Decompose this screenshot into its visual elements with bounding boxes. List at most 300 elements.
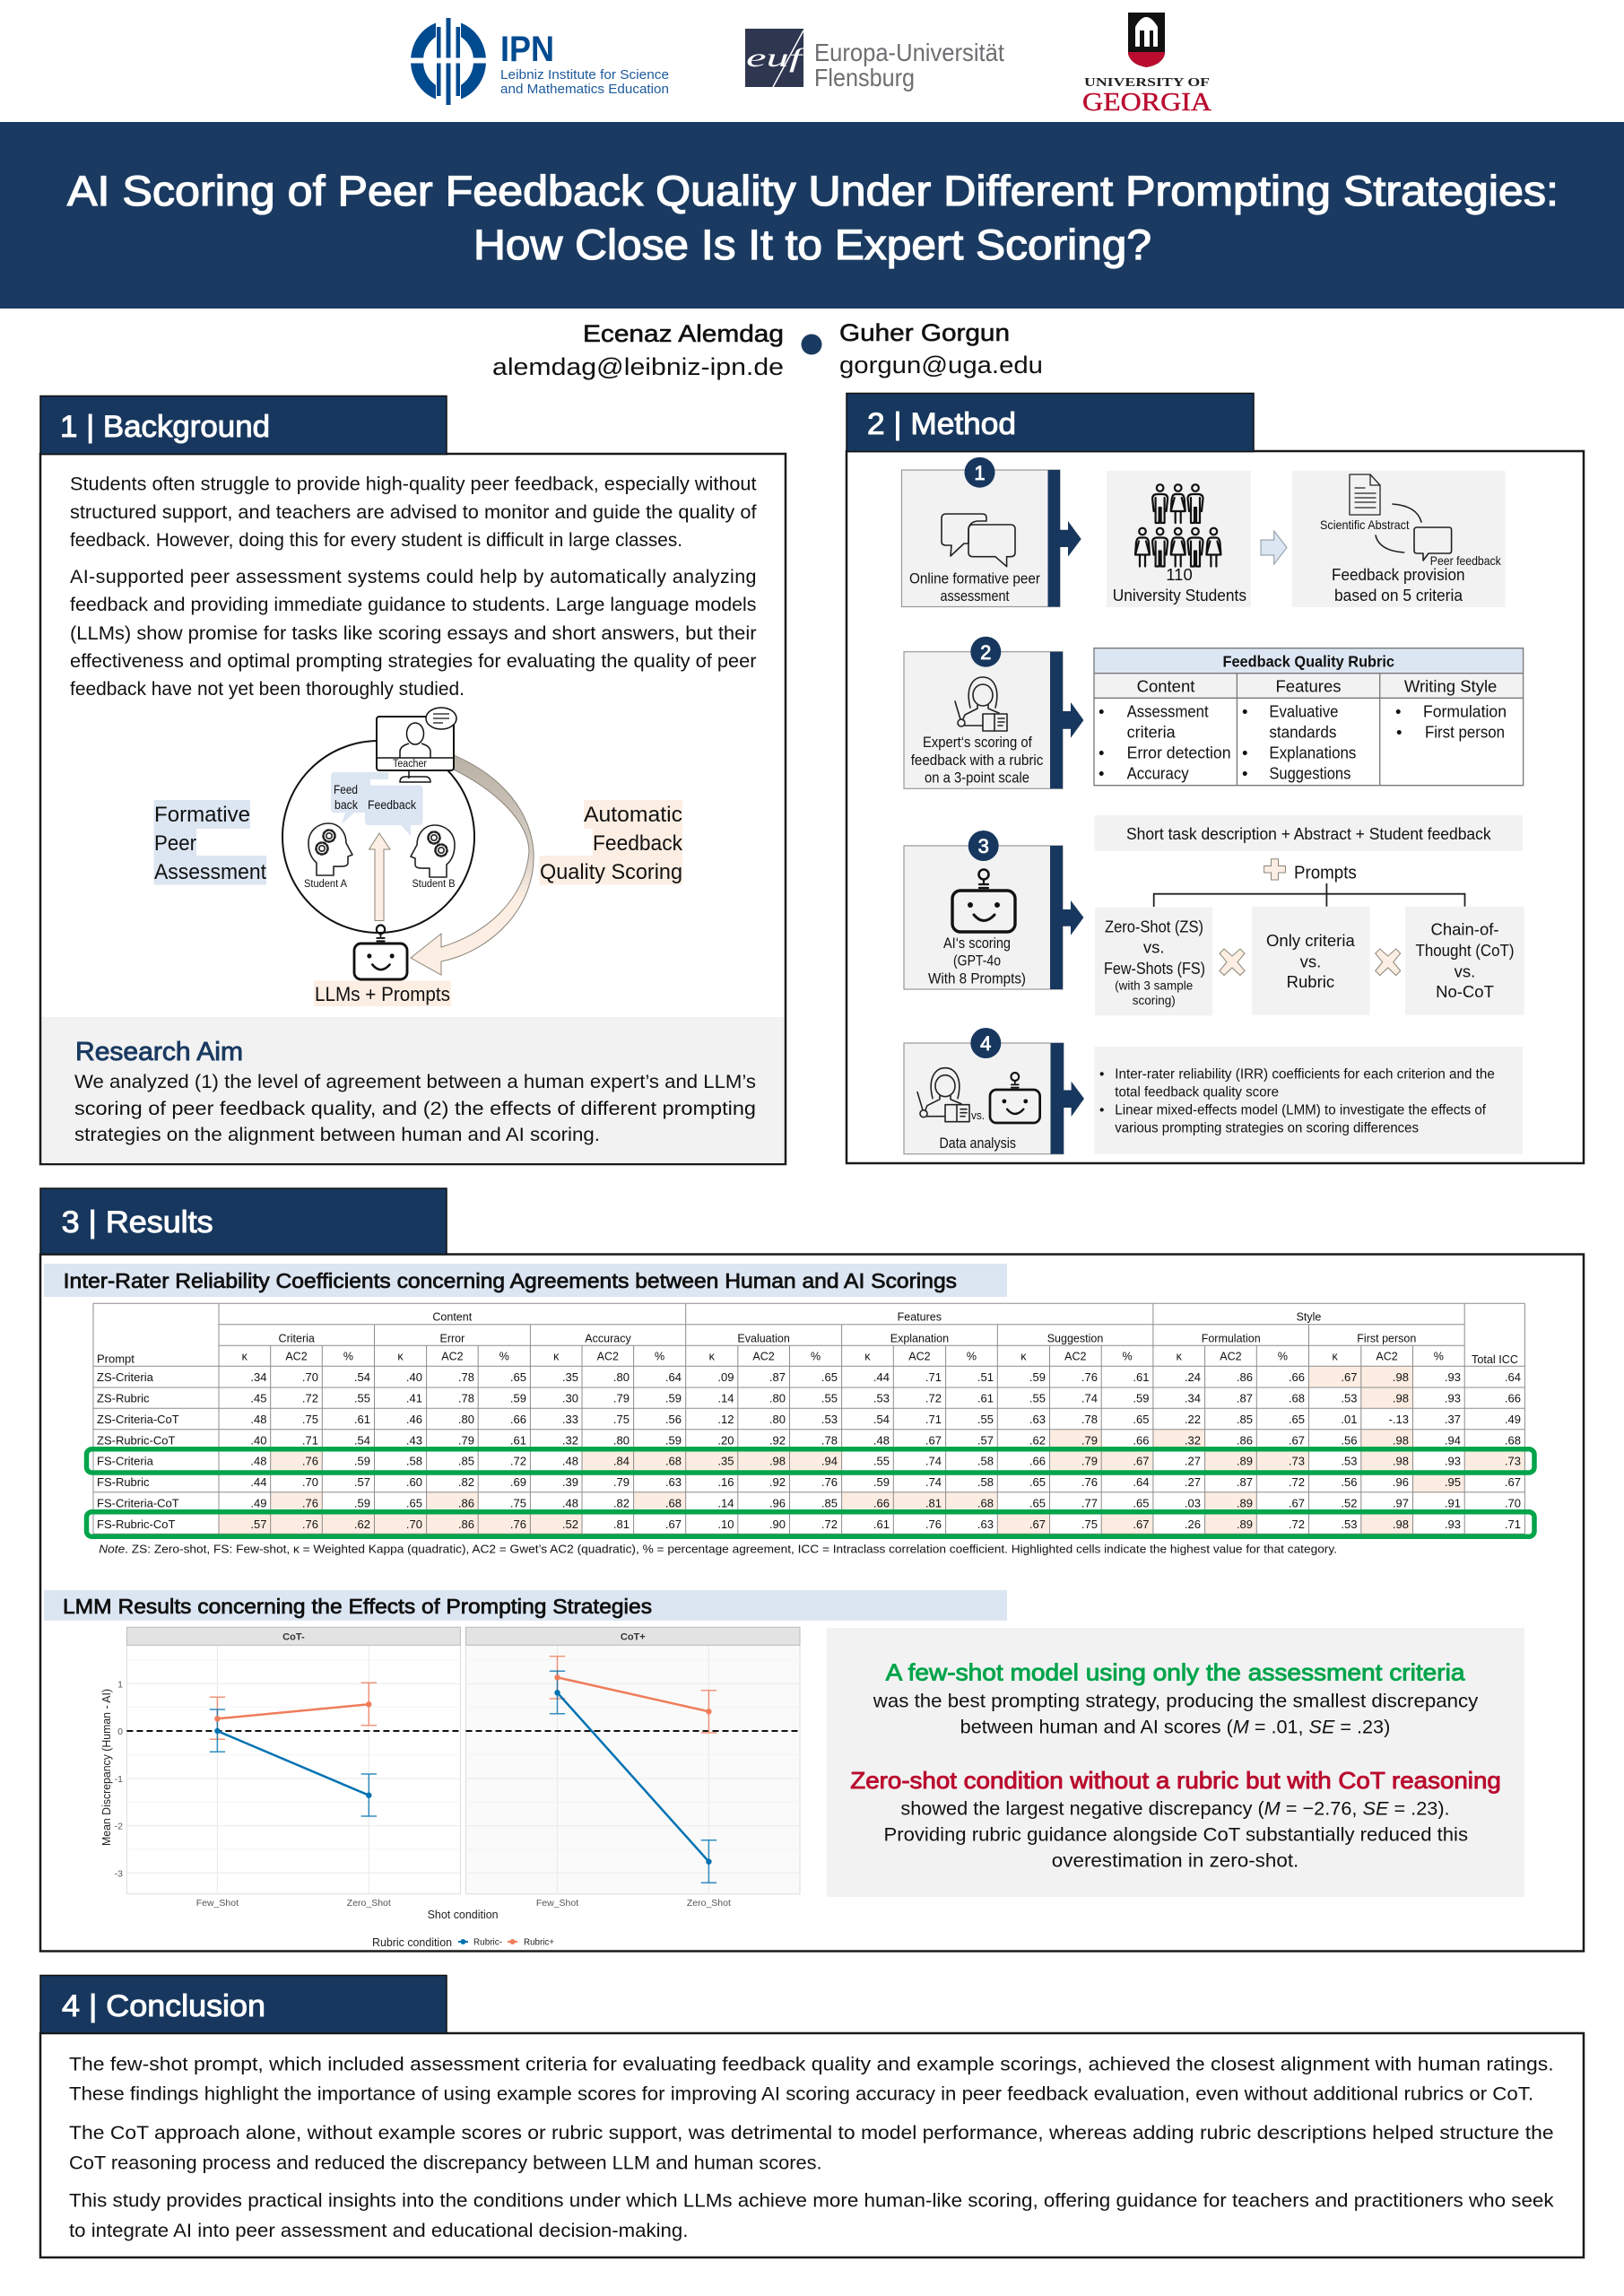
step 1 [902,457,1505,607]
icon: student A: Student A [304,879,347,890]
heading: background [40,396,447,454]
row: ZS-Criteria: .65 [821,1370,838,1384]
row: FS-Rubric-CoT: .89 [1237,1518,1253,1531]
row: FS-Rubric-CoT: .93 [1445,1518,1461,1531]
icon: robot LLM [354,926,407,979]
row: FS-Criteria: .67 [1133,1455,1150,1468]
row: ZS-Criteria-CoT: .56 [665,1413,682,1426]
table header: Error [440,1333,465,1345]
text block: background paragraphs: feedback and providing immediate guidance to students. Large language models [70,594,757,615]
table header: κ [864,1351,871,1363]
label: automatic feedback quality scoring: Automatic [584,803,682,827]
research aim [41,1017,784,1163]
110 university students: University Students [1113,586,1246,604]
row: ZS-Criteria-CoT: .46 [406,1413,422,1426]
analysis description: total feedback quality score [1115,1085,1279,1100]
row: ZS-Rubric: .79 [613,1392,630,1405]
table header: Evaluation [737,1333,790,1345]
row: FS-Criteria-CoT: .97 [1393,1496,1409,1509]
row: ZS-Rubric-CoT: .66 [1133,1433,1150,1447]
callout: key findings: A few-shot model using only the assessment criteria [886,1658,1465,1685]
option: zero-shot vs few-shots [1095,908,1212,1015]
tree connector [1154,883,1465,907]
row: ZS-Criteria-CoT: .61 [354,1413,370,1426]
row: FS-Rubric: .96 [1393,1475,1409,1489]
table header: AC2 [1220,1351,1242,1363]
row: FS-Rubric: .64 [1133,1475,1150,1489]
row: FS-Criteria [97,1455,1521,1468]
row: FS-Criteria-CoT: .89 [1237,1496,1253,1509]
logo: Europa-Universität Flensburg [745,29,1004,91]
rubric: features items: standards [1269,722,1336,741]
row: FS-Rubric-CoT: .86 [458,1518,474,1531]
row: ZS-Criteria-CoT: .37 [1445,1413,1461,1426]
row: ZS-Rubric: .53 [873,1392,890,1405]
prompts heading: Prompts [1294,863,1357,883]
panel: method [847,393,1584,1163]
option: only criteria vs rubric: Only criteria [1266,931,1355,950]
row: FS-Criteria: .94 [821,1455,838,1468]
icon: student A [304,823,352,890]
row: FS-Rubric: .67 [1505,1475,1521,1489]
option: chain-of-thought vs no-cot: Thought (CoT) [1415,941,1514,960]
row: ZS-Criteria: ZS-Criteria [97,1370,154,1384]
rubric: content items [1099,701,1231,782]
row: ZS-Rubric: .34 [1185,1392,1201,1405]
row: FS-Criteria: .93 [1445,1455,1461,1468]
subheading: inter-rater reliability: Inter-Rater Reliability Coefficients concerning Agreements between Human and AI Scorings [64,1269,957,1292]
step 3 [904,815,1524,1015]
row: ZS-Rubric: .93 [1445,1392,1461,1405]
row: ZS-Criteria-CoT: .85 [1237,1413,1253,1426]
row: FS-Rubric-CoT: .52 [562,1518,578,1531]
x axis: Few_Shot [196,1898,239,1909]
table header: % [811,1351,821,1363]
row: ZS-Criteria-CoT: .75 [613,1413,630,1426]
text block: conclusion paragraphs: This study provides practical insights into the conditions under which LLMs achieve more human-like scoring, offering guidance for teachers and practitioners who seek [69,2190,1554,2212]
row: FS-Rubric: .79 [613,1475,630,1489]
row: ZS-Criteria [97,1370,1521,1384]
row: ZS-Rubric: .66 [1505,1392,1521,1405]
row: FS-Criteria-CoT: .59 [354,1496,370,1509]
table: feedback quality rubric: Features [1275,677,1342,696]
step 2 box: 2 [980,641,991,664]
row: ZS-Rubric: .61 [977,1392,994,1405]
feedback provision: based on 5 criteria [1334,586,1463,604]
table header: % [1278,1351,1288,1363]
table header: Formulation [1202,1333,1261,1345]
table header: AC2 [908,1351,931,1363]
row: FS-Criteria-CoT: .49 [250,1496,267,1509]
table header: AC2 [1376,1351,1398,1363]
label: automatic feedback quality scoring: Quality Scoring [540,860,682,884]
row: FS-Rubric-CoT: .26 [1185,1518,1201,1531]
speech bubble: feed back: Feed [334,783,358,796]
row: FS-Rubric-CoT: .53 [1341,1518,1358,1531]
row: FS-Criteria: .84 [613,1455,630,1468]
label: automatic feedback quality scoring: Feedback [593,831,683,856]
row: FS-Criteria: .89 [1237,1455,1253,1468]
panel: conclusion [40,1975,1584,2257]
table header: AC2 [752,1351,775,1363]
table header: % [499,1351,509,1363]
row: FS-Rubric: .39 [562,1475,578,1489]
text block: conclusion paragraphs: These findings highlight the importance of using example scores for improving AI scoring accuracy in peer feedback evaluation, even without additional rubrics or CoT. [69,2083,1533,2105]
option: only criteria vs rubric [1252,907,1370,1015]
authors: gorgun@uga.edu [839,352,1043,378]
panel: results [40,1188,1584,1952]
analysis description [1094,1047,1523,1154]
table header: κ [397,1351,404,1363]
logos row [405,13,1211,117]
row: FS-Rubric: .56 [1341,1475,1358,1489]
rubric: content items: • [1099,763,1104,782]
row: FS-Criteria: .76 [302,1455,318,1468]
logo: Europa-Universität Flensburg: Europa-Universität [814,39,1004,66]
row: FS-Criteria-CoT: .96 [769,1496,786,1509]
row: ZS-Criteria: .61 [1133,1370,1150,1384]
table header: Prompt [97,1352,135,1365]
authors: alemdag@leibniz-ipn.de [492,353,784,380]
arrow: light [1261,531,1287,564]
option: only criteria vs rubric: vs. [1300,952,1321,970]
row: ZS-Criteria: .51 [977,1370,994,1384]
text block: background paragraphs: Students often struggle to provide high-quality peer feedback, especially without [70,474,757,495]
text block: background paragraphs: AI-supported peer assessment systems could help by automatically analyzing [70,566,757,587]
table header: κ [242,1351,248,1363]
row: ZS-Rubric: .59 [1133,1392,1150,1405]
row: FS-Rubric: .65 [1029,1475,1046,1489]
row: ZS-Rubric-CoT [97,1433,1521,1447]
row: ZS-Criteria-CoT: ZS-Criteria-CoT [97,1413,179,1426]
callout: key findings: showed the largest negative discrepancy (M = −2.76, SE = .23). [900,1797,1450,1819]
text block: background paragraphs: feedback have not yet been thoroughly studied. [70,678,465,700]
rubric: writing style items [1395,701,1507,741]
row: FS-Rubric-CoT: .63 [977,1518,994,1531]
logo: University of Georgia [1082,13,1211,117]
row: FS-Criteria-CoT: .67 [1289,1496,1305,1509]
row: FS-Rubric-CoT: .76 [925,1518,942,1531]
table header: Features [898,1311,942,1324]
row: FS-Criteria-CoT: .03 [1185,1496,1201,1509]
row: ZS-Rubric-CoT: .59 [665,1433,682,1447]
step 3 box: (GPT-4o [953,952,1001,970]
row: FS-Criteria: .98 [1393,1455,1409,1468]
step 4 box: vs. [971,1109,985,1122]
row: ZS-Rubric-CoT: .56 [1341,1433,1358,1447]
row: ZS-Rubric: .55 [1029,1392,1046,1405]
facet: CoT- [126,1627,460,1894]
table header: Content [432,1311,473,1324]
row: ZS-Criteria-CoT: .78 [1081,1413,1098,1426]
feedback provision [1292,471,1505,607]
label: formative peer assessment [154,800,266,884]
row: FS-Rubric: FS-Rubric [97,1475,150,1489]
row: FS-Criteria-CoT: .65 [1133,1496,1150,1509]
row: ZS-Criteria: .54 [354,1370,370,1384]
callout: key findings: between human and AI scores (M = .01, SE = .23) [960,1716,1390,1737]
row: ZS-Criteria: .80 [613,1370,630,1384]
table header: AC2 [285,1351,308,1363]
logo: University of Georgia: UNIVERSITY OF [1084,76,1210,90]
table header: κ [1177,1351,1183,1363]
row: FS-Criteria: .72 [510,1455,526,1468]
text block: background paragraphs: feedback. However, doing this for every student is difficult in large classes. [70,529,682,551]
x axis [196,1898,731,1921]
row: ZS-Rubric-CoT: .68 [1505,1433,1521,1447]
row: ZS-Criteria-CoT: .63 [1029,1413,1046,1426]
feedback provision: Scientific Abstract [1320,517,1410,532]
row: FS-Criteria: .66 [1029,1455,1046,1468]
text block: conclusion paragraphs: The CoT approach alone, without example scores or rubric support, was detrimental to model performance, whereas adding rubric descriptions helped structure the [69,2122,1554,2144]
chart: LMM discrepancy by shot condition [100,1627,800,1949]
row: FS-Criteria: .68 [665,1455,682,1468]
row: ZS-Rubric-CoT: .57 [977,1433,994,1447]
label: automatic feedback quality scoring [540,800,683,884]
row: FS-Rubric: .72 [1289,1475,1305,1489]
row: FS-Criteria-CoT: .52 [1341,1496,1358,1509]
row: ZS-Rubric-CoT: .79 [1081,1433,1098,1447]
step 1 box: assessment [940,587,1010,604]
row: ZS-Rubric: .74 [1081,1392,1098,1405]
speech bubble: feed back: back [334,798,358,812]
row: ZS-Rubric: .45 [250,1392,267,1405]
row: FS-Criteria-CoT: FS-Criteria-CoT [97,1496,179,1509]
row: FS-Rubric-CoT [97,1518,1521,1531]
row: ZS-Criteria: .70 [302,1370,318,1384]
row: ZS-Rubric-CoT: .48 [873,1433,890,1447]
row: ZS-Criteria: .59 [1029,1370,1046,1384]
option: zero-shot vs few-shots: Zero-Shot (ZS) [1105,917,1203,935]
logo: University of Georgia: GEORGIA [1082,88,1211,117]
option: zero-shot vs few-shots: scoring) [1133,994,1176,1007]
row: FS-Criteria: .58 [406,1455,422,1468]
callout: key findings: overestimation in zero-shot. [1052,1850,1298,1872]
highlight: FS-Criteria row [86,1449,1534,1473]
analysis description: Linear mixed-effects model (LMM) to investigate the effects of [1115,1102,1487,1118]
table header [97,1311,1518,1366]
logo: IPN: and Mathematics Education [500,82,669,97]
row: FS-Criteria-CoT: .81 [925,1496,942,1509]
row: FS-Criteria: .35 [717,1455,734,1468]
row: ZS-Rubric-CoT: .62 [1029,1433,1046,1447]
label: formative peer assessment: Formative [154,803,250,827]
row: ZS-Criteria: .40 [406,1370,422,1384]
icon: student B: Student B [413,879,456,890]
row: FS-Criteria-CoT: .66 [873,1496,890,1509]
step 2 box [904,637,1083,788]
legend: Rubric condition [372,1935,452,1949]
icon: multiply 2 [1376,949,1401,976]
row: ZS-Rubric: .98 [1393,1392,1409,1405]
step 3 box: 3 [978,835,989,857]
analysis description: • [1099,1102,1104,1118]
row: FS-Criteria: .27 [1185,1455,1201,1468]
110 university students [1107,471,1251,607]
row: FS-Rubric-CoT: .90 [769,1518,786,1531]
icon: multiply 1 [1220,949,1245,976]
rubric: writing style items: First person [1425,722,1505,741]
table header: % [655,1351,664,1363]
row: ZS-Criteria: .64 [665,1370,682,1384]
row: FS-Criteria: FS-Criteria [97,1455,154,1468]
table header: First person [1357,1333,1416,1345]
row: ZS-Criteria: .65 [510,1370,526,1384]
row: ZS-Rubric: .78 [458,1392,474,1405]
rubric: features items: Evaluative [1269,701,1338,720]
row: ZS-Criteria-CoT: .33 [562,1413,578,1426]
row: FS-Rubric-CoT: .72 [1289,1518,1305,1531]
row: FS-Rubric: .27 [1185,1475,1201,1489]
row: ZS-Criteria: .93 [1445,1370,1461,1384]
row: FS-Criteria: .98 [769,1455,786,1468]
diagram: peer assessment loop [154,708,683,1006]
logo: IPN [405,18,669,105]
x axis: Zero_Shot [687,1898,731,1909]
authors: Guher Gorgun [839,319,1010,346]
row: ZS-Criteria-CoT: .55 [977,1413,994,1426]
row: FS-Rubric: .57 [354,1475,370,1489]
table header: AC2 [597,1351,619,1363]
row: ZS-Rubric-CoT: .78 [821,1433,838,1447]
row: ZS-Rubric-CoT: .61 [510,1433,526,1447]
row: ZS-Rubric: .55 [821,1392,838,1405]
table header: % [1122,1351,1133,1363]
prompt base: Short task description + Abstract + Student feedback [1126,824,1491,843]
row: ZS-Rubric-CoT: .92 [769,1433,786,1447]
heading: background: 1 | Background [60,410,270,444]
row: ZS-Criteria-CoT: .80 [769,1413,786,1426]
row: ZS-Criteria: .87 [769,1370,786,1384]
prompt base [1094,815,1523,851]
prompts heading [1264,859,1357,883]
y axis: -2 [115,1822,123,1832]
step 1 box: 1 [974,462,986,484]
legend [372,1935,554,1949]
step 3 box: AI‘s scoring [943,935,1011,952]
logo: Europa-Universität Flensburg: Flensburg [814,64,915,91]
row: ZS-Criteria: .35 [562,1370,578,1384]
analysis description: Inter-rater reliability (IRR) coefficients for each criterion and the [1115,1067,1495,1083]
table header: Explanation [890,1333,949,1345]
analysis description: various prompting strategies on scoring differences [1115,1120,1419,1135]
row: ZS-Criteria: .09 [717,1370,734,1384]
logo: Europa-Universität Flensburg: euf [746,43,807,73]
row: FS-Criteria: .73 [1289,1455,1305,1468]
authors [492,319,1043,380]
row: ZS-Rubric-CoT: .43 [406,1433,422,1447]
row: FS-Criteria-CoT: .75 [510,1496,526,1509]
row: FS-Criteria: .73 [1505,1455,1521,1468]
row: FS-Criteria: .79 [1081,1455,1098,1468]
rubric: writing style items: • [1395,701,1401,720]
row: ZS-Criteria: .64 [1505,1370,1521,1384]
speech bubble: feed back [331,772,388,824]
table header: κ [553,1351,560,1363]
title banner: AI Scoring of Peer Feedback Quality Under Different Prompting Strategies: [67,167,1559,214]
row: FS-Rubric: .76 [1081,1475,1098,1489]
row: FS-Rubric-CoT: .67 [1029,1518,1046,1531]
row: FS-Criteria-CoT: .65 [1029,1496,1046,1509]
row: FS-Rubric: .76 [821,1475,838,1489]
row: FS-Criteria: .48 [562,1455,578,1468]
row: FS-Rubric-CoT: .70 [406,1518,422,1531]
step 2 box: feedback with a rubric [911,752,1044,769]
text block: background paragraphs: structured support, and teachers are advised to monitor and guide the quality of [70,501,757,523]
rubric: features items: • [1242,763,1247,782]
row: ZS-Rubric: .59 [665,1392,682,1405]
title banner [0,122,1624,309]
row: FS-Rubric: .60 [406,1475,422,1489]
row: ZS-Criteria-CoT: -.13 [1389,1413,1409,1426]
step 4 box [904,1028,1084,1154]
option: zero-shot vs few-shots: (with 3 sample [1115,978,1193,992]
row: FS-Criteria: .59 [354,1455,370,1468]
row: FS-Rubric-CoT: .61 [873,1518,890,1531]
y axis: 1 [117,1679,123,1690]
row: ZS-Rubric-CoT: .86 [1237,1433,1253,1447]
table: feedback quality rubric: Writing Style [1404,677,1497,696]
highlight: FS-Rubric-CoT row [86,1512,1534,1536]
row: FS-Rubric-CoT: .67 [1133,1518,1150,1531]
110 university students: 110 [1166,565,1193,584]
row: ZS-Rubric: .14 [717,1392,734,1405]
row: ZS-Criteria-CoT: .22 [1185,1413,1201,1426]
heading: method: 2 | Method [867,407,1016,441]
row: FS-Criteria: .58 [977,1455,994,1468]
arrow: LLM to students [369,833,390,920]
facet: CoT+ [466,1627,800,1894]
table header: Style [1297,1311,1321,1324]
option: only criteria vs rubric: Rubric [1287,972,1334,991]
row: FS-Rubric-CoT: .62 [354,1518,370,1531]
row: FS-Rubric: .95 [1445,1475,1461,1489]
row: ZS-Rubric-CoT: .32 [1185,1433,1201,1447]
row: FS-Criteria: .85 [458,1455,474,1468]
row: ZS-Criteria-CoT: .53 [821,1413,838,1426]
row: FS-Criteria-CoT: .65 [406,1496,422,1509]
rubric: features items: • [1242,744,1247,762]
row: ZS-Rubric: .80 [769,1392,786,1405]
step 2 [904,637,1524,788]
row: ZS-Rubric: .72 [925,1392,942,1405]
row: ZS-Criteria: .71 [925,1370,942,1384]
row: ZS-Criteria-CoT: .65 [1289,1413,1305,1426]
rubric: content items: Error detection [1127,744,1231,762]
row: ZS-Criteria-CoT: .65 [1133,1413,1150,1426]
row: ZS-Rubric-CoT: .67 [1289,1433,1305,1447]
text block: background paragraphs: (LLMs) show promise for tasks like scoring essays and short answers, but their [70,622,757,644]
rubric: writing style items: • [1396,722,1402,741]
step 1 box [902,457,1081,606]
row: ZS-Rubric-CoT: .32 [562,1433,578,1447]
row: FS-Criteria: .74 [925,1455,942,1468]
row: FS-Criteria-CoT: .68 [977,1496,994,1509]
research aim: We analyzed (1) the level of agreement between a human expert’s and LLM’s [74,1071,756,1092]
row: FS-Criteria-CoT: .86 [458,1496,474,1509]
row: ZS-Criteria: .78 [458,1370,474,1384]
option: zero-shot vs few-shots: Few-Shots (FS) [1104,959,1205,978]
subheading: LMM results [44,1590,1007,1621]
icon: teacher monitor: Teacher [393,759,427,770]
row: ZS-Criteria-CoT: .80 [458,1413,474,1426]
row: ZS-Rubric-CoT: ZS-Rubric-CoT [97,1433,175,1447]
table header: AC2 [1064,1351,1087,1363]
row: ZS-Rubric-CoT: .20 [717,1433,734,1447]
heading: results: 3 | Results [62,1205,213,1239]
text block: background paragraphs: effectiveness and optimal prompting strategies for evaluating the quality of peer [70,650,757,672]
row: ZS-Criteria-CoT: .71 [925,1413,942,1426]
